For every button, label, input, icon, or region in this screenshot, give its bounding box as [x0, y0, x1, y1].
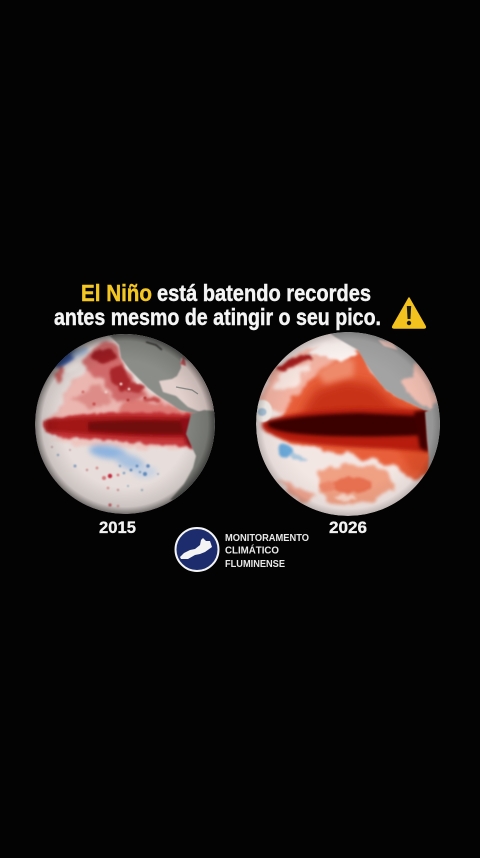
top white area and north pacific streak	[276, 341, 358, 372]
icon: state silhouette	[180, 538, 212, 559]
globe: 2026	[254, 330, 445, 516]
infographic canvas	[35, 284, 440, 572]
title	[54, 280, 381, 330]
land: South America	[424, 408, 440, 470]
blue patches	[254, 400, 272, 422]
equatorial band	[262, 408, 430, 452]
ocean base	[256, 332, 440, 516]
warm ocean field	[266, 349, 434, 480]
label: 2026: 2026	[329, 519, 367, 537]
icon: warning triangle	[393, 298, 425, 328]
land: North America	[330, 332, 439, 411]
land: South America	[170, 409, 215, 500]
speckles	[51, 381, 159, 507]
land: North America	[108, 334, 214, 414]
label: 2015: 2015	[99, 519, 136, 537]
land: Caribbean sea tint	[159, 358, 214, 412]
sphere shading	[35, 334, 215, 514]
ocean base	[35, 334, 215, 514]
organisation name: CLIMÁTICO	[225, 544, 279, 556]
cold anomalies: north pacific	[54, 346, 90, 374]
title: El Niño	[81, 280, 152, 306]
globe: 2015	[35, 330, 225, 514]
south pacific blue patch	[88, 443, 157, 478]
land: Arctic tint	[378, 340, 398, 350]
equatorial band	[44, 412, 193, 448]
organisation name: MONITORAMENTO	[225, 533, 309, 544]
title: antes mesmo de atingir o seu pico.	[54, 304, 381, 330]
sphere shading	[256, 332, 440, 516]
logo: Monitoramento Climático Fluminense	[176, 528, 309, 571]
organisation name	[225, 533, 309, 570]
land: Caribbean tint	[400, 362, 438, 408]
organisation name: FLUMINENSE	[225, 559, 285, 570]
title: está batendo recordes	[157, 280, 371, 306]
